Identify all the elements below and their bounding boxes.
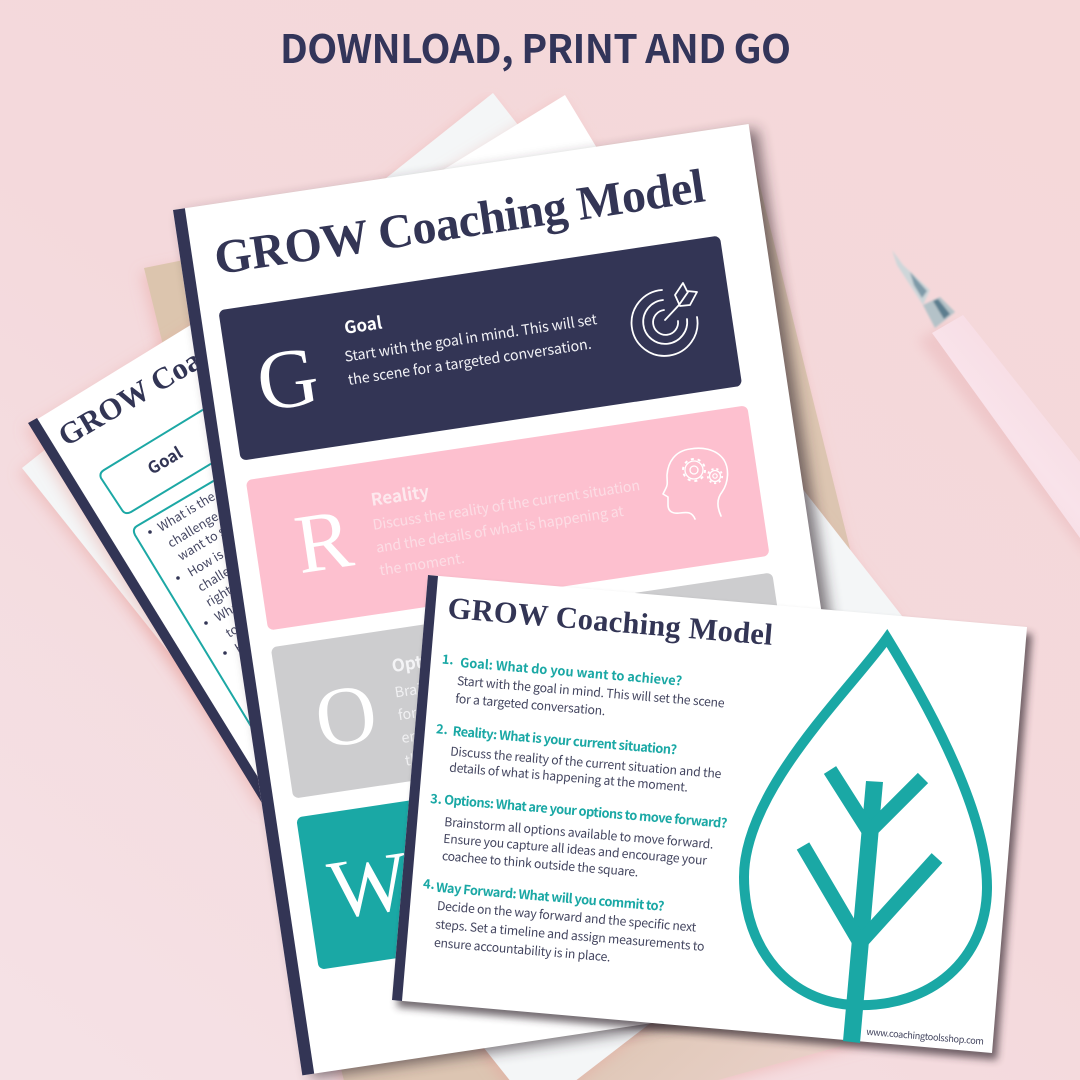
panel: way forward: W xyxy=(323,834,415,938)
back worksheet question box: challenge xyxy=(193,550,252,595)
step 4: Decide on the way forward and the specific next xyxy=(436,896,697,936)
title: DOWNLOAD, PRINT AND GO xyxy=(280,19,791,75)
panel: way forward xyxy=(296,743,820,970)
back worksheet question box: How xyxy=(230,626,263,656)
back worksheet question box: How is the xyxy=(183,533,245,580)
panel: goal: G xyxy=(251,329,325,430)
kraft envelope xyxy=(144,146,965,1080)
panel: landscape summary card xyxy=(392,575,1027,1053)
step 4 xyxy=(418,873,709,973)
back worksheet question box: challenge you xyxy=(163,493,242,551)
back worksheet question box: What is it xyxy=(210,582,266,625)
back worksheet question box xyxy=(134,430,320,840)
panel: goal xyxy=(218,235,742,461)
step 4: ensure accountability is in place. xyxy=(433,933,611,965)
step 1: Start with the goal in mind. This will set the scene xyxy=(456,671,726,711)
step 2 xyxy=(432,718,724,798)
panel: main poster sheet xyxy=(173,124,878,1075)
back worksheet goal box xyxy=(100,375,300,513)
card text xyxy=(413,591,1018,1048)
panel: goal: the scene for a targeted conversation. xyxy=(347,334,593,390)
card title: GROW Coaching Model xyxy=(446,591,774,652)
back worksheet question box: What is the current xyxy=(153,462,257,535)
icon: target with arrow xyxy=(632,283,698,356)
panel: reality: R xyxy=(289,492,358,592)
step 4: Way Forward: What will you commit to? xyxy=(435,877,665,915)
step 1 xyxy=(438,649,727,729)
back worksheet question box: to you? xyxy=(221,603,268,641)
back worksheet goal box: Goal xyxy=(142,440,186,479)
card spine xyxy=(392,575,438,1001)
step 3: Brainstorm all options available to move forward. xyxy=(444,812,714,853)
panel: options: Brainstorm all options available to move xyxy=(393,643,660,702)
step 2: 2. xyxy=(435,718,449,738)
step 2: details of what is happening at the moment. xyxy=(449,758,689,796)
panel: goal: Start with the goal in mind. This will set xyxy=(343,309,599,367)
back worksheet question box: want to solve? xyxy=(173,505,254,564)
step 4: 4. xyxy=(422,873,436,893)
leaf logo xyxy=(744,638,987,1043)
poster spine xyxy=(173,208,314,1075)
back worksheet spine xyxy=(28,418,272,808)
panel: options xyxy=(271,572,795,799)
panel: options: Options xyxy=(390,643,459,677)
step 2: Discuss the reality of the current situation and the xyxy=(450,742,722,782)
step 4: steps. Set a timeline and assign measurements to xyxy=(435,914,705,955)
back worksheet question box: right now? xyxy=(201,562,264,610)
step 3 xyxy=(425,788,728,888)
panel: reality xyxy=(246,405,770,631)
panel: options: encourage your coachee to think outside xyxy=(400,689,668,748)
panel: options: O xyxy=(309,666,383,767)
step 1: for a targeted conversation. xyxy=(455,689,606,719)
back worksheet title: GROW Coaching Model xyxy=(52,261,346,453)
step 3: Options: What are your options to move forward? xyxy=(444,789,728,832)
pen xyxy=(892,250,1080,560)
step 3: 3. xyxy=(430,788,443,808)
step 2: Reality: What is your current situation? xyxy=(452,721,678,758)
panel: reality: Reality xyxy=(369,477,431,511)
panel: options: the square. xyxy=(403,740,480,771)
panel: reality: the moment. xyxy=(378,548,466,580)
panel: reality: Discuss the reality of the current situation xyxy=(371,475,641,535)
poster title: GROW Coaching Model xyxy=(211,160,708,285)
step 1: Goal: What do you want to achieve? xyxy=(460,652,683,690)
step 1: 1. xyxy=(441,649,455,668)
icon: head with gears xyxy=(663,448,728,519)
website url: www.coachingtoolsshop.com xyxy=(866,1024,985,1048)
panel: reality: and the details of what is happening at xyxy=(375,501,626,558)
step 3: Ensure you capture all ideas and encourage your xyxy=(443,829,708,869)
panel: goal: Goal xyxy=(342,309,384,339)
panel: options: forward. Ensure you capture all ideas and xyxy=(397,665,669,725)
step 3: coachee to think outside the square. xyxy=(441,846,639,881)
panel: back worksheet xyxy=(28,95,792,840)
